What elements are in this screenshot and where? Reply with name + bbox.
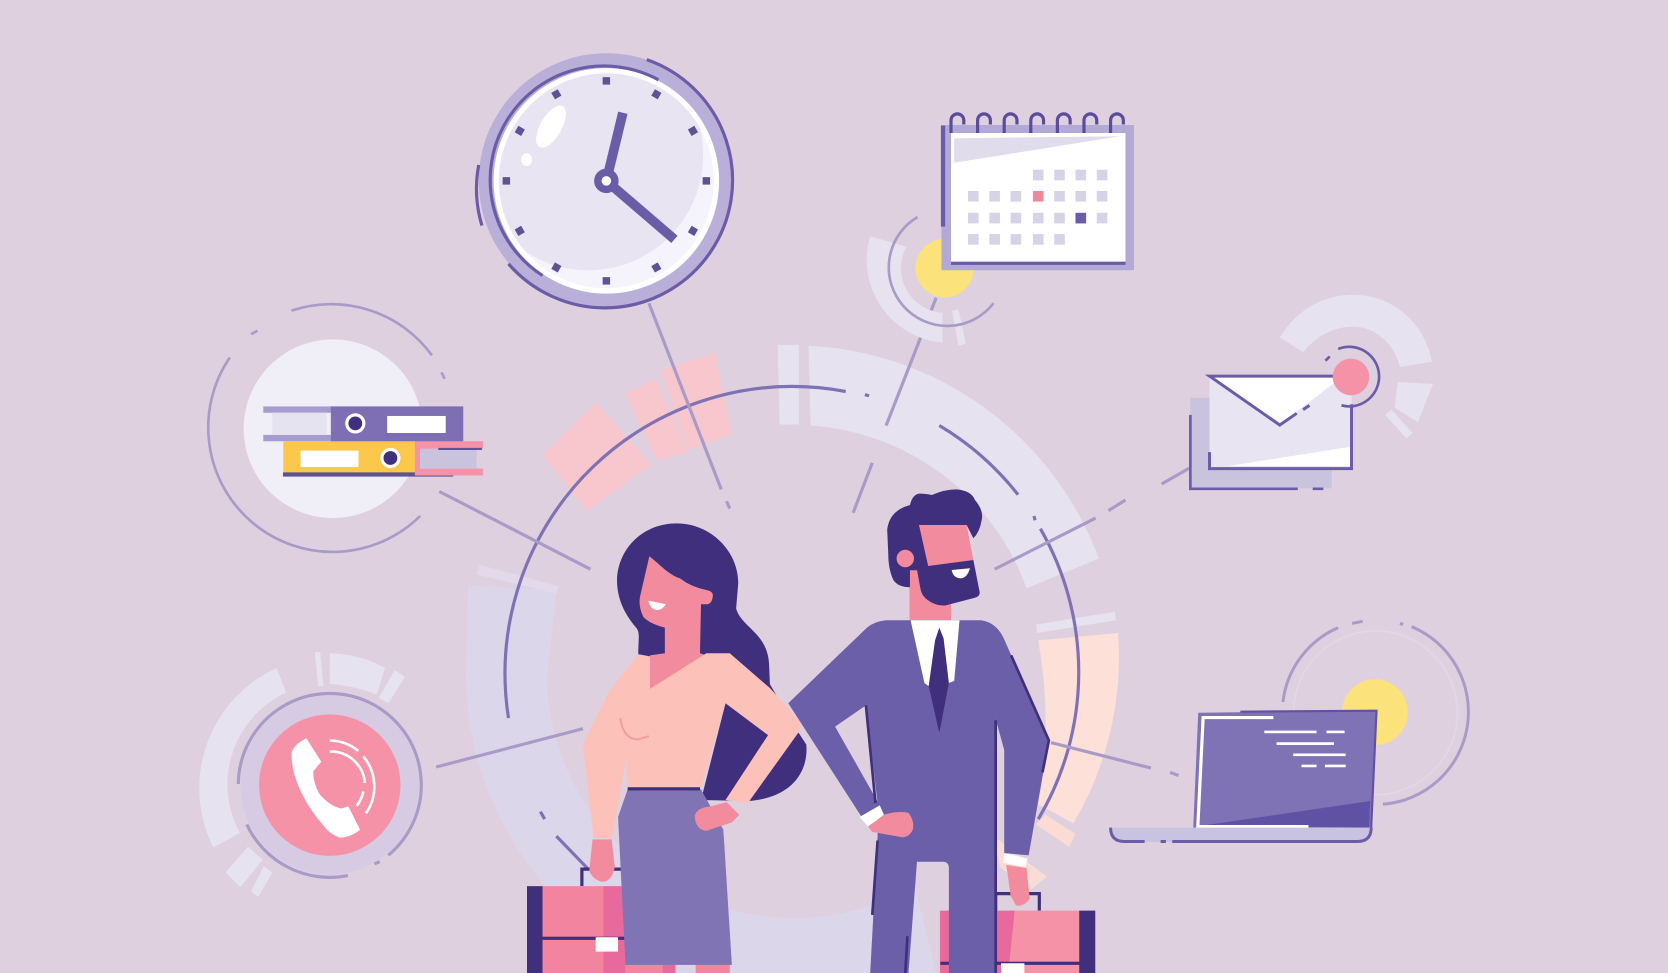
calendar day grid — [968, 170, 1107, 245]
woman right hand — [695, 802, 739, 831]
band: light top right — [808, 346, 1099, 588]
man left hand — [868, 812, 913, 837]
woman hair lower lobe — [701, 681, 807, 801]
clock face — [499, 74, 703, 270]
phone ring arcs — [238, 694, 421, 877]
calendar left edge — [941, 126, 945, 227]
briefcase body — [1008, 911, 1079, 973]
clock outer outlines — [476, 60, 733, 308]
laptop screen — [1193, 711, 1377, 828]
calendar yellow sun — [915, 239, 974, 297]
calendar bottom edge — [951, 262, 1125, 265]
envelope shadow outline — [1190, 415, 1323, 489]
band: peach small strip — [1036, 815, 1075, 847]
calendar header — [954, 136, 1120, 163]
phone light bands — [199, 652, 405, 897]
woman smile — [648, 601, 666, 610]
briefcase shaded side — [603, 886, 633, 973]
briefcase body — [543, 886, 603, 973]
man left cuff — [860, 805, 884, 827]
clock gloss — [521, 101, 572, 166]
band: peach patch by the hand — [994, 836, 1047, 891]
man smile — [952, 568, 970, 578]
central ring backdrop — [466, 345, 1119, 973]
folder: purple binder — [263, 406, 463, 442]
icon: phone — [199, 652, 421, 897]
envelope badge ring — [1325, 347, 1379, 406]
envelope outline — [1210, 376, 1352, 469]
man suit — [788, 620, 1049, 973]
woman skirt — [618, 789, 732, 965]
woman blouse fold — [620, 718, 649, 739]
folders white disc — [244, 339, 422, 518]
man ear — [897, 550, 914, 567]
briefcase shaded side — [991, 911, 1015, 973]
clock inner highlight — [499, 73, 714, 288]
calendar frame — [941, 125, 1134, 270]
band: lavender left and bottom — [466, 585, 936, 973]
laptop screen shadow — [1203, 801, 1370, 828]
band: light strip at top — [778, 345, 799, 424]
phone ring band — [240, 696, 419, 874]
laptop code lines — [1264, 732, 1346, 766]
woman hair — [617, 523, 770, 703]
laptop white edge — [1198, 718, 1308, 827]
envelope pink badge — [1333, 359, 1369, 395]
briefcase handle — [996, 894, 1039, 911]
briefcase dark strip — [527, 886, 543, 973]
icon: folders — [208, 304, 483, 552]
laptop faint ring — [1294, 631, 1457, 795]
man beard — [915, 557, 980, 605]
icon: calendar — [867, 114, 1134, 346]
woman blouse — [583, 653, 801, 838]
briefcase: woman's — [527, 869, 730, 973]
band: pink segments — [543, 353, 732, 511]
man right cuff — [1003, 853, 1028, 867]
figure: man — [788, 489, 1049, 973]
man shirt — [911, 620, 960, 686]
briefcase strap — [543, 937, 626, 940]
calendar light strip — [952, 310, 966, 346]
phone signal arcs — [330, 740, 374, 813]
man neck — [910, 559, 951, 624]
laptop yellow sun — [1342, 679, 1408, 745]
central ring arcs — [505, 386, 1079, 868]
briefcase: man's — [940, 894, 1095, 973]
folder: yellow binder — [283, 441, 483, 477]
figure: woman — [583, 523, 807, 965]
envelope lower highlight — [1229, 447, 1351, 466]
briefcase strap — [940, 962, 1080, 965]
folders arcs — [208, 304, 445, 552]
woman left hand — [589, 839, 615, 882]
man right hand — [1006, 865, 1030, 906]
envelope white fold — [1210, 377, 1342, 424]
phone handset — [291, 738, 360, 838]
clock white dial — [494, 68, 719, 294]
man suit dark accents — [866, 655, 1049, 973]
icon: envelope — [1190, 295, 1433, 489]
envelope light bands — [1280, 295, 1433, 438]
calendar spiral rings — [951, 114, 1123, 133]
band: peach right — [1038, 633, 1119, 823]
clock ticks — [503, 77, 710, 285]
calendar arc — [889, 217, 994, 326]
briefcase clasp — [596, 937, 618, 952]
laptop base — [1110, 828, 1371, 842]
icon: laptop — [1110, 621, 1468, 842]
laptop base outline — [1111, 828, 1371, 841]
laptop arcs — [1283, 621, 1468, 804]
icon: wall clock — [473, 40, 734, 309]
briefcase lower panel — [626, 962, 730, 973]
briefcase handle — [582, 869, 628, 886]
laptop screen outline — [1240, 711, 1377, 828]
man hair — [887, 489, 982, 587]
envelope body — [1210, 376, 1352, 469]
connector lines — [436, 298, 1189, 776]
envelope shadow — [1190, 398, 1332, 488]
calendar light band — [867, 236, 943, 343]
calendar page — [951, 133, 1125, 262]
briefcase clasp — [1001, 963, 1024, 973]
clock hands — [598, 113, 674, 239]
woman neck and face — [640, 556, 713, 689]
illustration: business people surrounded by work icons — [200, 53, 1470, 973]
band: lavender cap strip — [477, 565, 558, 594]
briefcase left side — [940, 911, 993, 973]
phone pink disc — [259, 714, 401, 856]
man face — [919, 525, 973, 566]
briefcase dark strip — [1079, 911, 1095, 973]
woman belt — [628, 787, 700, 790]
clock inner outline — [490, 66, 658, 276]
man tie — [929, 628, 949, 733]
clock rim — [479, 53, 734, 309]
band: lavender strip above peach — [1036, 612, 1116, 633]
